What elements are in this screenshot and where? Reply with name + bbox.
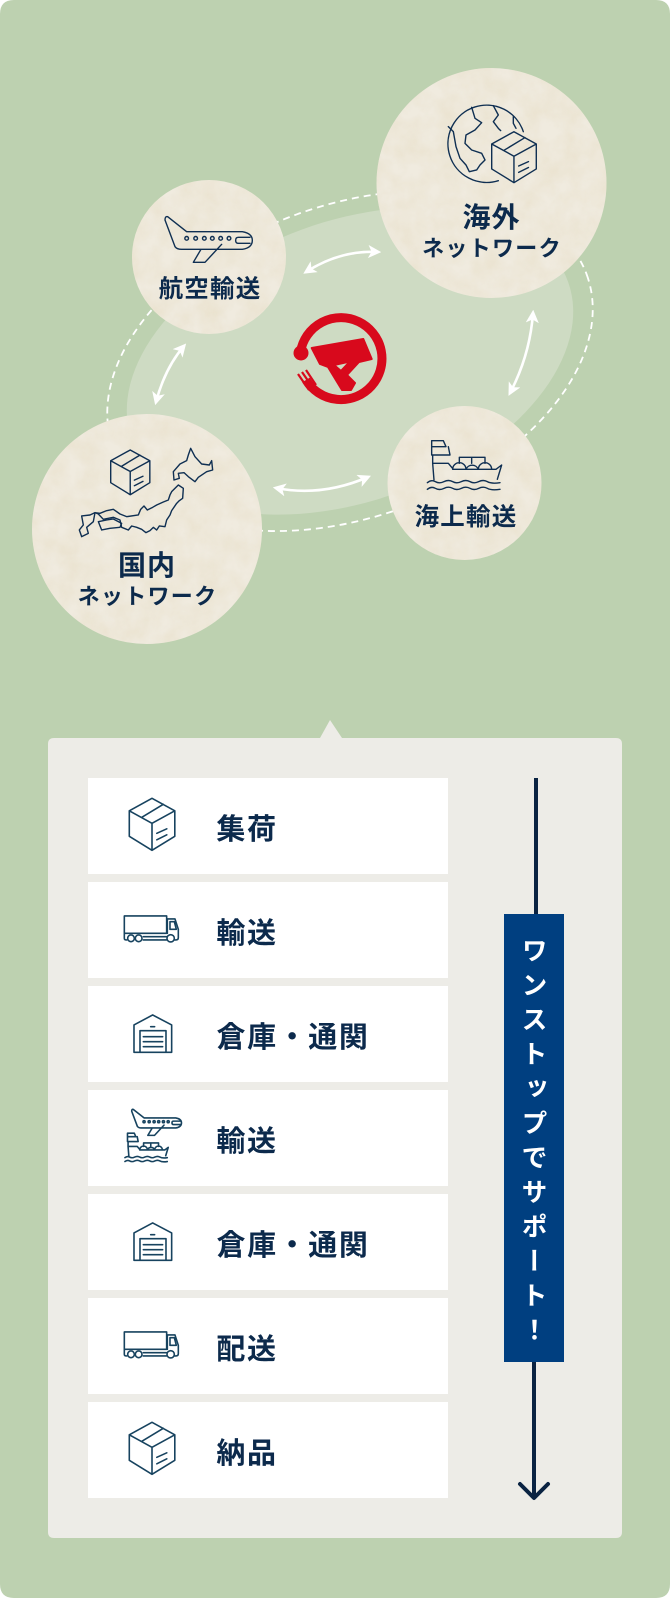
step: transport by air and sea	[88, 1090, 448, 1186]
icon: box	[129, 1422, 175, 1474]
icon: truck	[124, 1332, 178, 1358]
circle: air transport	[132, 180, 286, 334]
icon: plane and ship	[125, 1109, 181, 1162]
arrow: air to domestic	[156, 346, 184, 402]
step: transport: 輸送	[216, 917, 278, 950]
circle: sea transport	[388, 406, 542, 560]
icon: truck	[124, 916, 178, 942]
icon: box	[129, 798, 175, 850]
central light ellipse	[84, 150, 616, 572]
label: sea transport: 海上輸送	[415, 503, 517, 531]
logo	[294, 318, 382, 400]
step: warehouse and customs	[88, 986, 448, 1082]
arrow: air to overseas	[306, 252, 378, 272]
dashed route ellipse	[60, 128, 640, 594]
step: delivered goods	[88, 1402, 448, 1498]
arrow: process direction	[520, 778, 548, 1498]
step: delivery	[88, 1298, 448, 1394]
step: delivered goods: 納品	[216, 1437, 278, 1470]
label: domestic: 国内	[118, 550, 176, 581]
circle: overseas network	[376, 68, 606, 298]
arrow: domestic to sea	[276, 477, 368, 491]
banner: one-stop support	[504, 914, 564, 1362]
icon: warehouse	[134, 1223, 172, 1260]
icon: ship	[427, 441, 502, 490]
step: warehouse and customs: 倉庫・通関	[216, 1229, 370, 1262]
arrow: sea to overseas	[510, 313, 533, 393]
step: warehouse and customs	[88, 1194, 448, 1290]
step: pickup: 集荷	[216, 813, 278, 846]
step: transport	[88, 882, 448, 978]
step: warehouse and customs: 倉庫・通関	[216, 1021, 370, 1054]
step: pickup	[88, 778, 448, 874]
banner: one-stop support: ワンストップでサポート！	[516, 937, 553, 1351]
icon: box and Japan map	[79, 448, 213, 537]
network diagram	[32, 68, 640, 644]
icon: warehouse	[134, 1015, 172, 1052]
step: transport by air and sea: 輸送	[216, 1125, 278, 1158]
label: air transport: 航空輸送	[159, 275, 261, 303]
label: network: ネットワーク	[78, 584, 217, 609]
label: overseas: 海外	[462, 202, 521, 233]
label: network: ネットワーク	[422, 236, 562, 261]
icon: airplane	[165, 217, 252, 262]
step: delivery: 配送	[216, 1333, 278, 1366]
circle: domestic network	[32, 414, 262, 644]
panel: one-stop process	[48, 720, 622, 1538]
icon: globe and box	[448, 105, 536, 183]
